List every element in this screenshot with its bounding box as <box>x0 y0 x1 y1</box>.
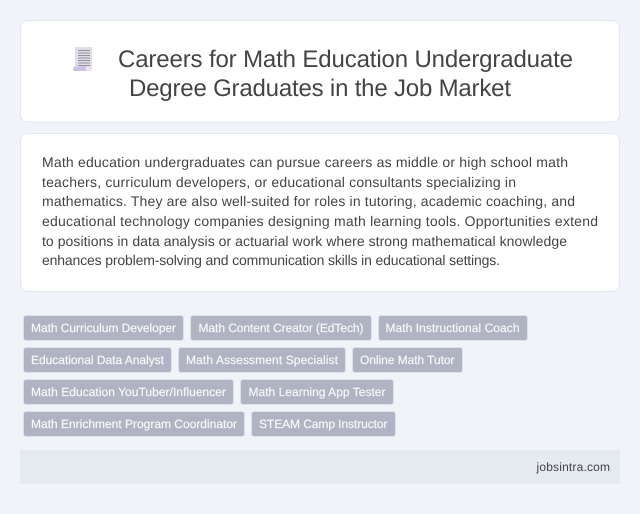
tag: Math Instructional Coach: Math Instructional Coach <box>386 321 520 335</box>
tag: Math Enrichment Program Coordinator <box>24 412 244 436</box>
tag: Math Assessment Specialist <box>178 348 346 372</box>
tag: Math Education YouTuber/Influencer: Math Education YouTuber/Influencer <box>31 385 226 399</box>
tag: Online Math Tutor: Online Math Tutor <box>360 353 454 367</box>
title: Careers for Math Education Undergraduate <box>118 46 573 73</box>
description text: educational technology companies designing math learning tools. Opportunities extend <box>42 213 598 229</box>
tag: Math Content Creator (EdTech): Math Content Creator (EdTech) <box>198 321 364 335</box>
tag: Math Learning App Tester: Math Learning App Tester <box>248 385 386 399</box>
career tags <box>24 316 528 436</box>
description text: enhances problem-solving and communication skills in educational settings. <box>42 252 500 268</box>
tag: Math Curriculum Developer <box>24 316 184 340</box>
tag: Math Content Creator (EdTech) <box>190 316 372 340</box>
description text <box>42 154 598 268</box>
tag: Math Curriculum Developer: Math Curriculum Developer <box>31 321 176 335</box>
footer <box>20 450 620 484</box>
description text: teachers, curriculum developers, or educational consultants specializing in <box>42 174 516 190</box>
tag: Educational Data Analyst: Educational Data Analyst <box>31 353 165 367</box>
tag: Online Math Tutor <box>352 348 462 372</box>
panel: description <box>20 134 620 292</box>
description text: to positions in data analysis or actuarial work where strong mathematical knowledge <box>42 233 567 249</box>
tag: Math Learning App Tester <box>240 380 394 404</box>
tag: Math Enrichment Program Coordinator: Math Enrichment Program Coordinator <box>31 417 237 431</box>
tag: Math Instructional Coach <box>378 316 528 340</box>
tag: Math Assessment Specialist: Math Assessment Specialist <box>186 353 339 367</box>
description text: mathematics. They are also well-suited for roles in tutoring, academic coaching, and <box>42 193 575 209</box>
footer source text: jobsintra.com <box>536 460 610 474</box>
tag: Educational Data Analyst <box>24 348 172 372</box>
icon: document scroll <box>73 47 92 71</box>
tag: STEAM Camp Instructor <box>252 412 396 436</box>
description text: Math education undergraduates can pursue careers as middle or high school math <box>42 154 568 170</box>
tag: STEAM Camp Instructor: STEAM Camp Instructor <box>259 417 388 431</box>
tag: Math Education YouTuber/Influencer <box>24 380 234 404</box>
title: Degree Graduates in the Job Market <box>129 75 511 102</box>
panel: header <box>20 20 620 122</box>
title <box>118 46 573 102</box>
